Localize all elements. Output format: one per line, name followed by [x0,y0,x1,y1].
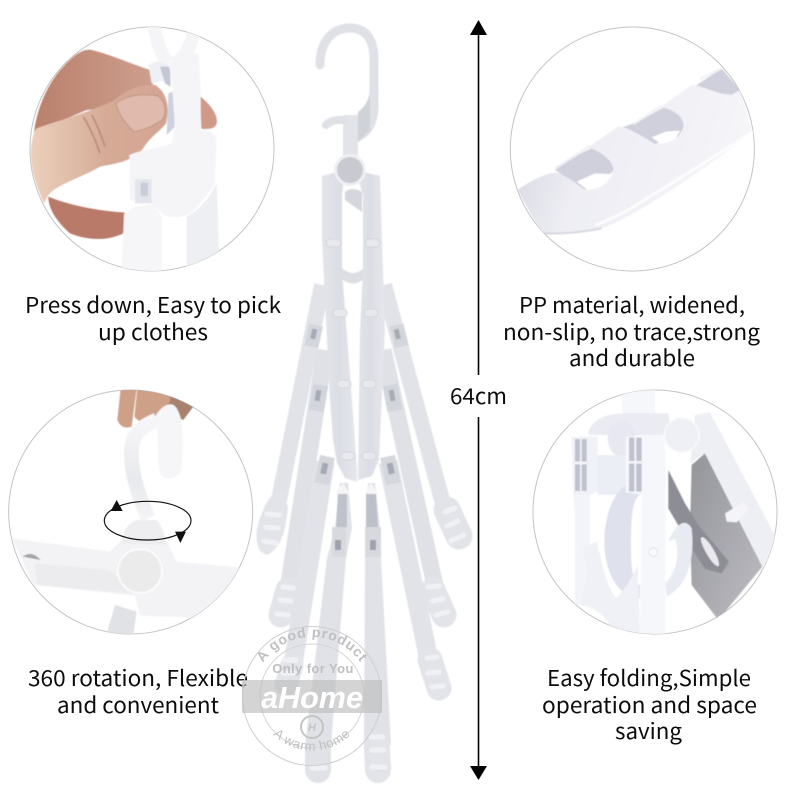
watermark [242,626,382,766]
lower arms [122,204,162,273]
caption: rotation: and convenient [57,688,219,720]
windows [577,131,680,189]
hinge top [588,413,672,435]
caption: rotation: 360 rotation, Flexible [28,661,248,693]
white frame [690,412,780,568]
inner dark hook [668,470,729,573]
watermark: Only for You [272,661,354,676]
arm: centre right [364,483,391,770]
arm: left third [283,455,335,685]
photo circle: press down [30,25,274,273]
button [119,551,160,592]
centre clip [629,438,642,492]
watermark: aHome [261,680,363,715]
watermark: A warm home [273,730,349,751]
left clip [575,439,587,491]
arm pivots [326,239,380,460]
centre column [626,434,666,635]
hook strands [154,25,195,63]
hinge gap [148,62,168,83]
thumbnail [116,95,165,132]
photo circle: folding [533,390,780,635]
caption: material: and durable [569,341,695,373]
arms [12,538,255,618]
back arm: right second [383,350,448,615]
arm: right third [380,455,443,688]
hook [320,28,374,137]
back arm: left outer [255,285,323,556]
arm: centre left [305,483,352,770]
back of hand [167,396,194,420]
centre hanger drum [598,455,628,495]
caption: material: PP material, widened, [519,288,745,320]
caption: folding: saving [615,714,683,746]
lever [129,53,217,217]
legs [107,605,137,635]
photo circle: material [510,27,754,271]
caption: press down [25,288,281,347]
left column [572,437,598,502]
lever window [135,179,152,203]
rotation arrow [104,500,191,543]
ring [604,482,640,598]
back fingers [34,50,157,133]
hook stem [131,420,157,518]
hook crossbar [342,268,364,284]
hook spine [345,189,362,212]
hook end [665,523,692,597]
lower rim [595,132,753,225]
thumb [31,85,168,203]
grey back panel [690,453,762,620]
hole interiors [555,68,740,190]
caption: folding [542,661,757,746]
caption: material [503,288,761,373]
base [122,520,166,542]
centre peg [649,548,658,557]
hook neck [343,115,358,163]
back lip [555,68,722,168]
hook brace [358,88,370,142]
back arm: left second [277,350,328,615]
height arrow [470,20,487,780]
thumb creases [83,115,105,153]
left main arm [322,170,357,482]
front face [518,85,752,234]
caption: material: non-slip, no trace,strong [503,315,761,347]
frame peg [724,508,739,523]
hook prong [326,120,344,125]
watermark: A good product [258,628,366,662]
hook end [155,404,183,479]
pivot button [336,156,364,184]
lower white hook [580,542,640,635]
fingers [117,388,170,427]
photo circle: 360 rotation [9,388,255,635]
back arm: right outer [384,285,464,541]
large button [664,418,699,452]
caption: folding: operation and space [542,688,757,720]
caption: press down: Press down, Easy to pick [25,288,281,320]
central hanger [255,28,464,770]
watermark: H [308,722,317,734]
right main arm [355,170,385,480]
height label: 64cm [450,379,507,411]
caption: press down: up clothes [98,315,208,347]
top neck [622,390,655,413]
caption: folding: Easy folding,Simple [547,661,751,693]
lower finger [48,197,125,239]
hinge drum [608,434,636,455]
fingertip behind hanger [197,95,217,129]
bolt hole [23,554,41,560]
caption: rotation [28,661,248,720]
